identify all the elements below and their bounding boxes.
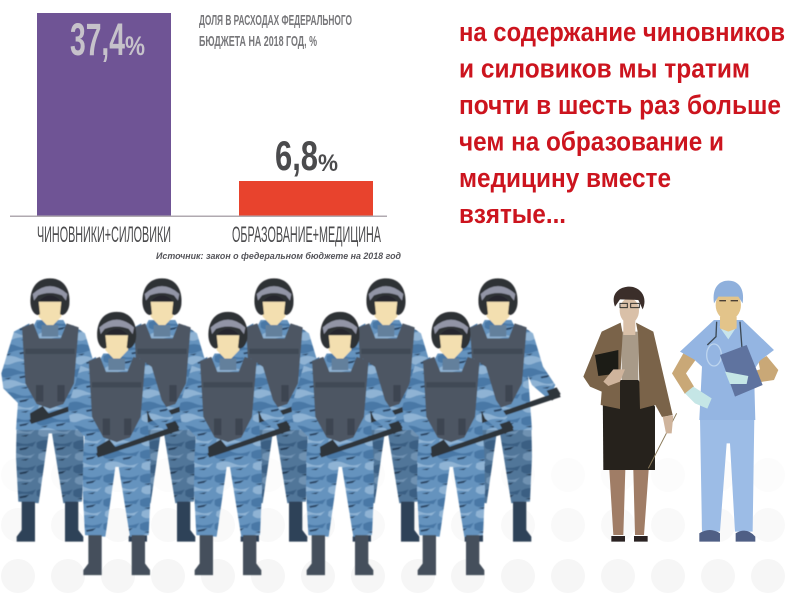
value: 37,4%: % <box>125 31 145 61</box>
chart title: БЮДЖЕТА НА 2018 ГОД, % <box>199 33 317 50</box>
soldier: back row 5 <box>449 278 561 542</box>
panel: budget bar chart <box>10 12 401 261</box>
headline text: чем на образование и <box>459 126 724 156</box>
soldier: front row 1 <box>68 312 179 575</box>
value: 6,8%: 6,8 <box>275 132 318 179</box>
headline text: взятые... <box>459 199 566 229</box>
illustration: riot police formation <box>1 278 561 575</box>
illustration: doctor <box>672 281 778 542</box>
value: 6,8%: % <box>318 150 338 177</box>
bar: education and medicine <box>239 181 373 216</box>
headline text <box>459 17 785 229</box>
headline text: и силовиков мы тратим <box>459 54 750 84</box>
panel: budget bar chart: ОБРАЗОВАНИЕ+МЕДИЦИНА <box>232 222 381 247</box>
bar: officials and security forces <box>37 13 171 216</box>
headline text: медицину вместе <box>459 163 671 193</box>
background: faint icon circles <box>1 458 785 593</box>
soldier: front row 2 <box>179 312 291 575</box>
value: 37,4%: 37,4 <box>70 14 125 65</box>
soldier: front row 3 <box>291 312 403 575</box>
soldier: back row 1 <box>1 278 113 542</box>
illustration: teacher <box>583 287 677 542</box>
soldier: back row 2 <box>113 278 225 542</box>
soldier: back row 4 <box>337 278 449 542</box>
chart title: ДОЛЯ В РАСХОДАХ ФЕДЕРАЛЬНОГО <box>199 12 352 29</box>
panel: budget bar chart: ЧИНОВНИКИ+СИЛОВИКИ <box>37 222 171 247</box>
soldier: back row 3 <box>225 278 337 542</box>
soldier: front row 4 <box>402 312 514 575</box>
source note: Источник: закон о федеральном бюджете на 2018 год <box>156 251 401 261</box>
chart title <box>199 12 352 50</box>
